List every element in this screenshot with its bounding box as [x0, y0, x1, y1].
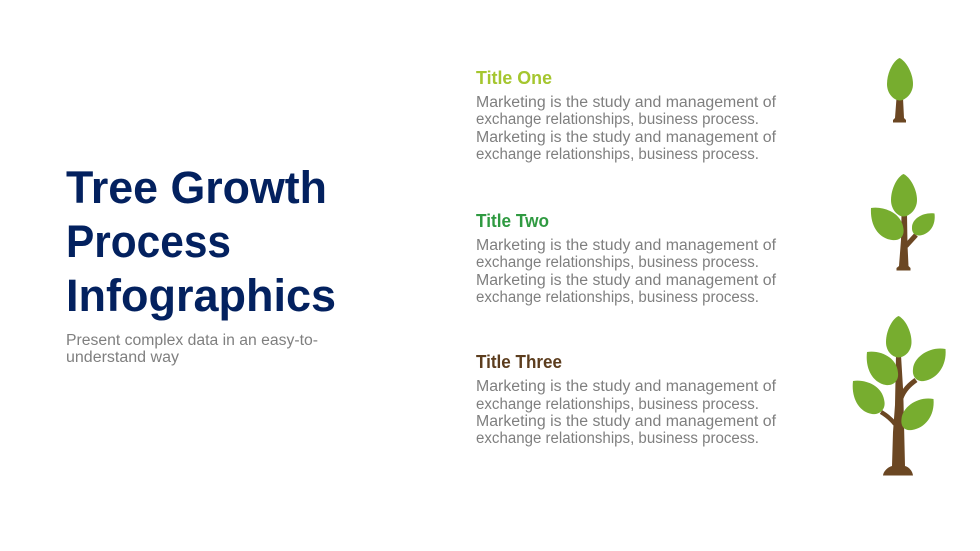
body: title one: [476, 94, 777, 163]
title: Tree Growth: [66, 162, 327, 213]
icon: large tree: [853, 316, 946, 476]
heading: title two: Title Two: [476, 211, 549, 231]
body: title one: Marketing is the study and management of: [476, 129, 777, 146]
body: title three: Marketing is the study and management of: [476, 378, 777, 395]
heading: title three: Title Three: [476, 352, 562, 372]
body: title two: Marketing is the study and management of: [476, 237, 777, 254]
icon: medium tree: [871, 174, 935, 270]
body: title three: exchange relationships, business process.: [476, 430, 759, 447]
icon: small sapling: [887, 58, 913, 122]
text block: title three: [476, 352, 777, 447]
body: title one: Marketing is the study and management of: [476, 94, 777, 111]
title: [66, 162, 336, 321]
subtitle: Present complex data in an easy-to-: [66, 332, 318, 349]
text block: title two: [476, 211, 777, 306]
body: title two: Marketing is the study and management of: [476, 272, 777, 289]
body: title three: Marketing is the study and management of: [476, 413, 777, 430]
body: title two: exchange relationships, business process.: [476, 289, 759, 306]
subtitle: understand way: [66, 349, 179, 366]
body: title one: exchange relationships, business process.: [476, 111, 759, 128]
body: title three: exchange relationships, business process.: [476, 396, 759, 413]
title: Process: [66, 216, 231, 267]
title: Infographics: [66, 270, 336, 321]
subtitle: [66, 332, 318, 366]
text block: title one: [476, 68, 777, 163]
body: title one: exchange relationships, business process.: [476, 146, 759, 163]
heading: title one: Title One: [476, 68, 552, 88]
body: title two: [476, 237, 777, 306]
body: title three: [476, 378, 777, 447]
body: title two: exchange relationships, business process.: [476, 254, 759, 271]
